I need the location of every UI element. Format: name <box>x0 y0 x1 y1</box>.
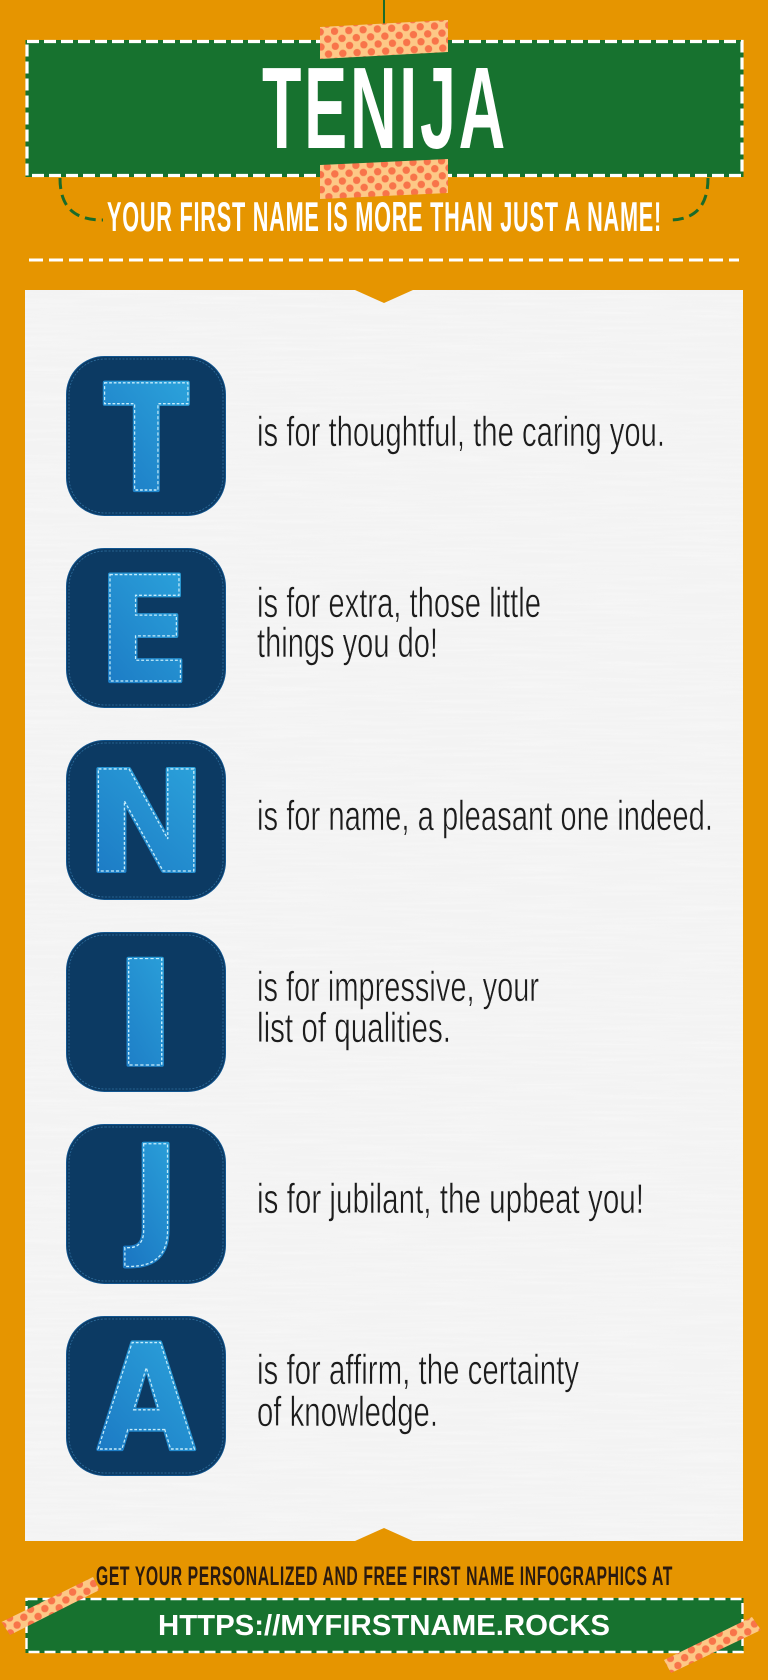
text: I lines <box>257 963 539 1051</box>
icon: letter E: E <box>98 546 190 716</box>
icon: letter A: A <box>98 1314 195 1484</box>
icon: letter E <box>66 546 226 716</box>
footer url: HTTPS://MYFIRSTNAME.ROCKS <box>158 1610 610 1642</box>
icon: letter A <box>66 1314 226 1484</box>
icon: letter A: A <box>98 1314 195 1484</box>
icon: letter T <box>66 355 226 526</box>
icon: letter I <box>66 930 226 1100</box>
footer banner <box>26 1598 744 1653</box>
text: I lines: list of qualities. <box>257 1004 451 1051</box>
left bracket <box>60 178 103 220</box>
icon: letter E: E <box>98 546 190 716</box>
text: A lines: is for affirm, the certainty <box>257 1346 579 1393</box>
icon: letter I: I <box>112 930 178 1100</box>
panel: letters <box>25 290 743 1541</box>
icon: letter T: T <box>104 355 189 526</box>
text: A lines <box>257 1346 579 1435</box>
tape: bottom of banner <box>320 159 448 199</box>
icon: letter N: N <box>85 741 207 904</box>
text: E lines: is for extra, those little <box>257 579 541 626</box>
text: I lines: is for impressive, your <box>257 963 539 1010</box>
text: E lines: things you do! <box>257 619 438 666</box>
hanging string <box>383 0 385 24</box>
title: TENIJA <box>262 43 508 173</box>
right bracket <box>669 178 708 220</box>
title banner <box>26 40 744 177</box>
tape: top of banner <box>320 20 448 59</box>
text: A lines: of knowledge. <box>257 1388 438 1435</box>
icon: letter J <box>66 1118 226 1284</box>
icon: letter N: N <box>85 741 207 904</box>
icon: letter T: T <box>104 355 189 526</box>
icon: letter J: J <box>124 1118 179 1272</box>
text: E lines <box>257 579 541 666</box>
icon: letter J: J <box>124 1118 179 1272</box>
tape: footer left <box>2 1577 100 1635</box>
tape: footer right <box>664 1617 761 1673</box>
dashed divider <box>29 258 739 262</box>
icon: letter I: I <box>112 930 178 1100</box>
